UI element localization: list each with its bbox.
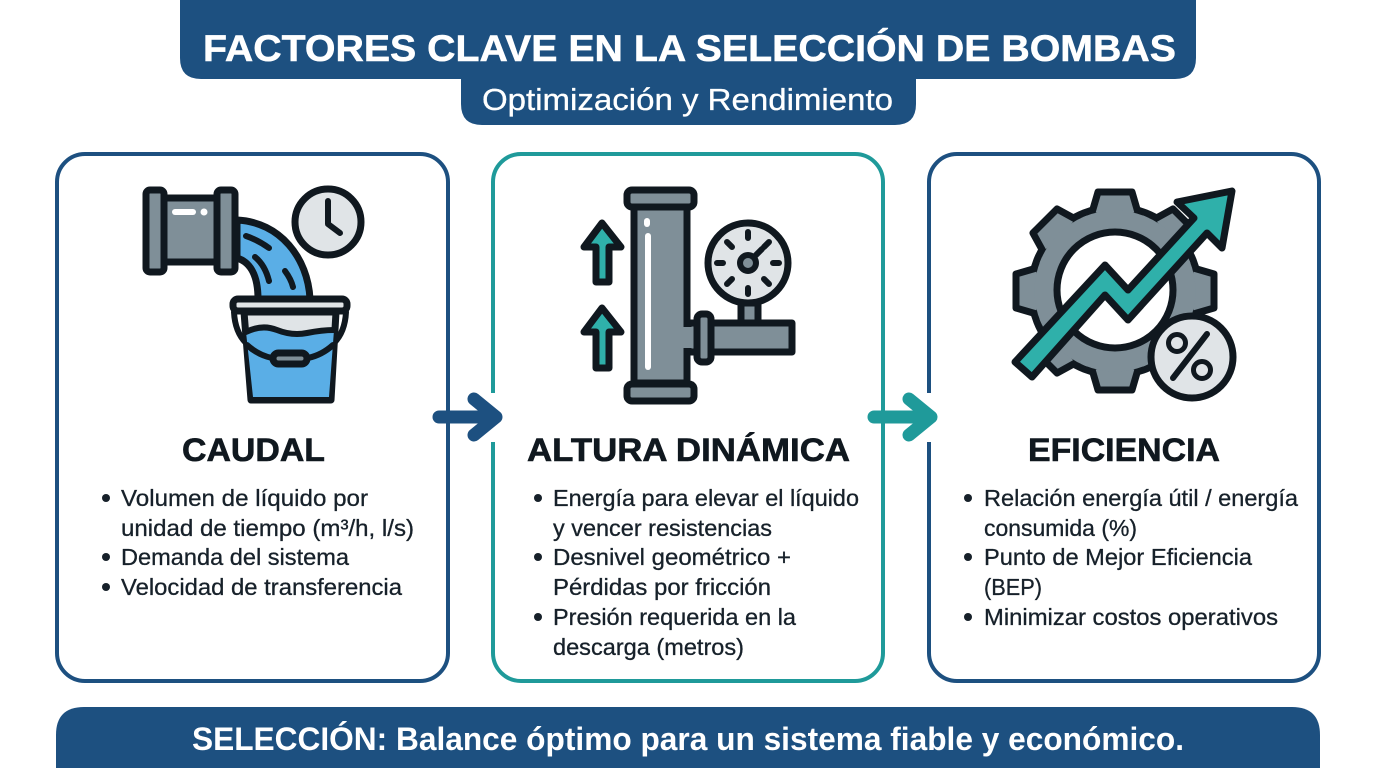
panel: caudal (57, 154, 448, 681)
bullet list: altura dinamica: descarga (metros) (553, 634, 744, 660)
arrow: caudal to altura dinamica (439, 393, 501, 442)
arrow: altura dinamica to eficiencia (874, 393, 936, 442)
bullet list: eficiencia: consumida (%) (984, 515, 1137, 541)
footer text: SELECCIÓN: Balance óptimo para un sistema fiable y económico. (192, 721, 1184, 757)
bullet list: eficiencia (964, 485, 1298, 630)
bullet list: caudal (102, 485, 414, 600)
bullet list: caudal: unidad de tiempo (m³/h, l/s) (121, 515, 414, 541)
bullet list: altura dinamica: y vencer resistencias (553, 515, 772, 541)
bullet list: caudal: Volumen de líquido por (121, 485, 368, 511)
bullet list: altura dinamica (534, 485, 859, 660)
icon: vertical pipe with pressure gauge and up arrows (584, 190, 792, 401)
panel: eficiencia (929, 154, 1319, 681)
subtitle: Optimización y Rendimiento (482, 82, 893, 117)
bullet list: eficiencia: Relación energía útil / energía (984, 485, 1298, 511)
bullet list: altura dinamica: Pérdidas por fricción (553, 574, 771, 600)
icon: gear with rising arrow and percent (1015, 191, 1233, 398)
heading: caudal: CAUDAL (182, 432, 325, 468)
heading: eficiencia: EFICIENCIA (1028, 432, 1220, 468)
panel: altura dinamica (493, 154, 883, 681)
heading: altura dinamica: ALTURA DINÁMICA (527, 432, 850, 468)
footer banner (56, 707, 1320, 768)
icon: pipe pouring water into bucket (146, 189, 361, 400)
bullet list: eficiencia: Minimizar costos operativos (984, 604, 1278, 630)
bullet list: altura dinamica: Presión requerida en la (553, 604, 796, 630)
bullet list: caudal: Demanda del sistema (121, 544, 349, 570)
title: FACTORES CLAVE EN LA SELECCIÓN DE BOMBAS (203, 27, 1176, 69)
bullet list: altura dinamica: Desnivel geométrico + (553, 544, 791, 570)
header banner (180, 0, 1196, 125)
bullet list: altura dinamica: Energía para elevar el líquido (553, 485, 859, 511)
bullet list: eficiencia: (BEP) (984, 574, 1042, 600)
bullet list: caudal: Velocidad de transferencia (121, 574, 402, 600)
bullet list: eficiencia: Punto de Mejor Eficiencia (984, 544, 1252, 570)
